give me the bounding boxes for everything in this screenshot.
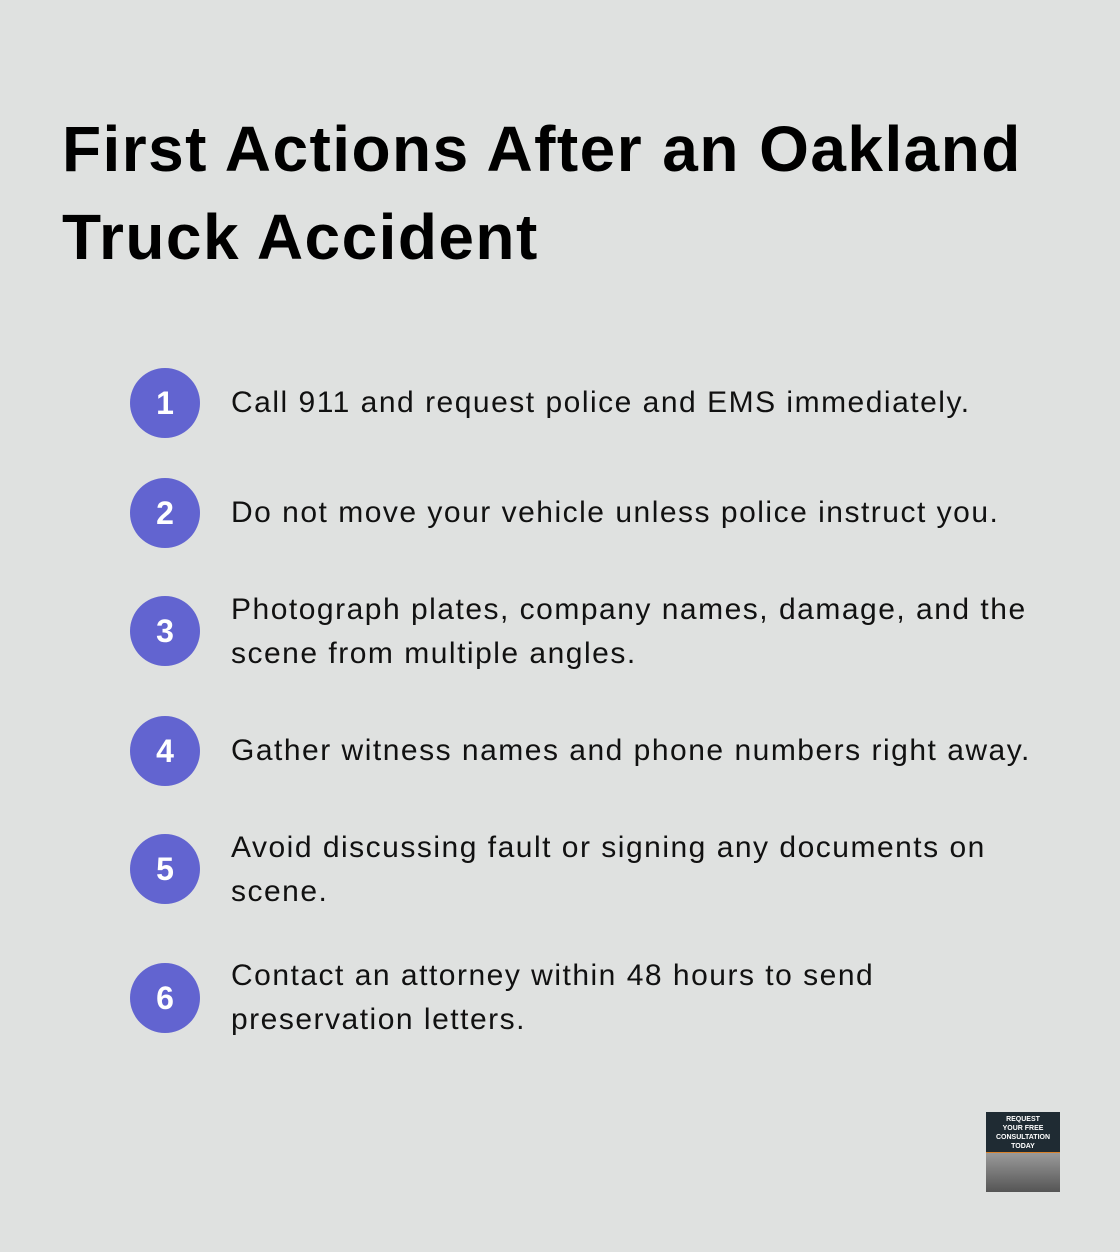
step 1: Call 911 and request police and EMS immediately. <box>231 386 971 419</box>
step 6: Contact an attorney within 48 hours to send <box>231 959 874 992</box>
step 3: Photograph plates, company names, damage, and the <box>231 593 1027 626</box>
step 5: Avoid discussing fault or signing any documents on <box>231 831 986 864</box>
step 1: 1 <box>156 385 174 421</box>
logo badge: CONSULTATION <box>996 1134 1050 1141</box>
step 4 <box>130 716 1031 786</box>
step 3: 3 <box>156 613 174 649</box>
step 3: scene from multiple angles. <box>231 637 637 670</box>
logo badge: REQUEST <box>1006 1116 1040 1123</box>
logo badge: YOUR FREE <box>1003 1125 1043 1132</box>
step 5 <box>130 831 986 908</box>
step 5: 5 <box>156 851 174 887</box>
step 4: 4 <box>156 733 174 769</box>
title: First Actions After an Oakland <box>62 113 1022 185</box>
step 5: scene. <box>231 875 328 908</box>
step 3 <box>130 593 1027 670</box>
step 4: Gather witness names and phone numbers right away. <box>231 734 1031 767</box>
step 2 <box>130 478 999 548</box>
step 6: preservation letters. <box>231 1003 526 1036</box>
logo badge <box>986 1112 1060 1192</box>
step 6 <box>130 959 874 1036</box>
title <box>62 113 1022 273</box>
step 2: Do not move your vehicle unless police instruct you. <box>231 496 999 529</box>
step 1 <box>130 368 971 438</box>
step 2: 2 <box>156 495 174 531</box>
title: Truck Accident <box>62 201 539 273</box>
step 6: 6 <box>156 980 174 1016</box>
logo badge: TODAY <box>1011 1143 1035 1150</box>
